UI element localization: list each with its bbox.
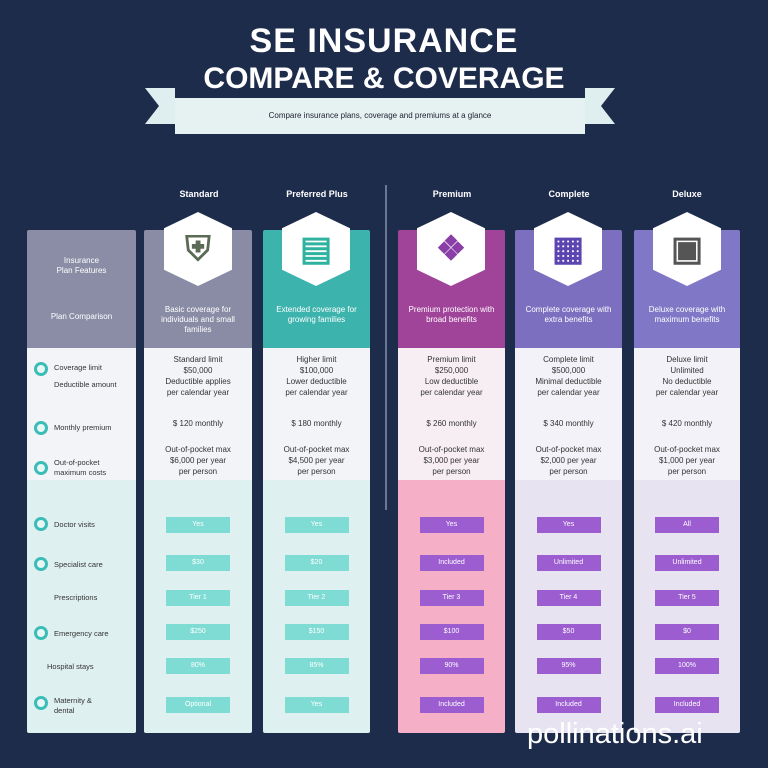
column 1: $50,000 <box>184 366 212 375</box>
column 5: per calendar year <box>656 388 718 397</box>
column 5: Deluxe limit <box>666 355 708 364</box>
column 2: Out-of-pocket max <box>284 445 349 454</box>
column 5 <box>634 230 740 733</box>
subtitle: Compare insurance plans, coverage and premiums at a glance <box>269 111 491 120</box>
panel: labels column: Hospital stays <box>47 662 94 671</box>
column 2: per person <box>297 467 336 476</box>
column 5: Out-of-pocket max <box>654 445 720 454</box>
column 4: per person <box>549 467 588 476</box>
column 3: per calendar year <box>420 388 483 397</box>
column 5: Unlimited <box>672 559 702 566</box>
icon: chart: ▦ <box>552 230 584 268</box>
icon: shield <box>164 212 232 286</box>
column 3: Included <box>438 559 465 566</box>
column 3: $250,000 <box>435 366 468 375</box>
column 5: $0 <box>683 628 691 635</box>
column 1: per calendar year <box>167 388 229 397</box>
column 2: per calendar year <box>285 388 348 397</box>
column 5: per person <box>668 467 706 476</box>
column 1: Optional <box>185 701 211 708</box>
panel: labels column: Emergency care <box>54 629 109 638</box>
column captions <box>179 189 702 199</box>
column 2: $4,500 per year <box>288 456 345 465</box>
panel: labels column: Specialist care <box>54 560 103 569</box>
column 1: $6,000 per year <box>170 456 226 465</box>
column captions: Standard <box>179 189 218 199</box>
column 3: Tier 3 <box>443 594 460 601</box>
panel: labels column: Plan Features <box>57 266 106 275</box>
icon: document <box>282 212 350 286</box>
column 1: $30 <box>192 559 204 566</box>
icon: document: ▤ <box>300 230 332 268</box>
column 2: 85% <box>309 662 324 669</box>
ribbon banner <box>145 88 615 134</box>
column 3: Yes <box>446 521 457 528</box>
column 5: Deluxe coverage with maximum benefits <box>649 305 725 324</box>
divider <box>385 185 387 510</box>
icon: briefcase: ▣ <box>671 230 703 268</box>
column 4: $2,000 per year <box>540 456 597 465</box>
panel: labels column: maximum costs <box>54 468 106 477</box>
column 5: $ 420 monthly <box>662 419 712 428</box>
icons <box>164 212 721 286</box>
column 1 <box>144 230 252 733</box>
column 2: Higher limit <box>296 355 336 364</box>
column 4: 95% <box>561 662 576 669</box>
column 5: No deductible <box>663 377 711 386</box>
column 3: $ 260 monthly <box>426 419 477 428</box>
column 4: Minimal deductible <box>535 377 602 386</box>
column 5: Unlimited <box>670 366 704 375</box>
panel: labels column: Out-of-pocket <box>54 458 99 467</box>
column 1: Yes <box>192 521 204 528</box>
panel: labels column: Coverage limit <box>54 363 102 372</box>
column 1: Basic coverage for individuals and small families <box>161 305 235 334</box>
column 2: $ 180 monthly <box>291 419 342 428</box>
column captions: Complete <box>548 189 590 199</box>
column 2: Tier 2 <box>308 594 325 601</box>
column 1: $ 120 monthly <box>173 419 223 428</box>
column 2: $20 <box>311 559 322 566</box>
panel: labels column <box>27 230 136 733</box>
title: SE INSURANCE <box>250 22 518 60</box>
column 4: $ 340 monthly <box>543 419 594 428</box>
column 2: $100,000 <box>300 366 333 375</box>
column 3: 90% <box>444 662 458 669</box>
column 4: Yes <box>563 521 574 528</box>
column 1: per person <box>179 467 217 476</box>
column captions: Premium <box>433 189 471 199</box>
column 3: per person <box>432 467 471 476</box>
column 3: $3,000 per year <box>423 456 480 465</box>
column 1: Tier 1 <box>189 594 207 601</box>
panel: labels column: Insurance <box>64 256 99 265</box>
column 5: $1,000 per year <box>659 456 715 465</box>
column 4: Included <box>555 701 582 708</box>
column 4 <box>515 230 622 733</box>
column 2: $150 <box>309 628 324 635</box>
panel: labels column: Prescriptions <box>54 593 97 602</box>
column 1: $250 <box>190 628 206 635</box>
panel: labels column: Monthly premium <box>54 423 112 432</box>
column 3: $100 <box>444 628 459 635</box>
column 2: Yes <box>311 701 322 708</box>
column 4: Complete limit <box>543 355 594 364</box>
column 3: Premium protection with broad benefits <box>409 305 494 324</box>
column 3: Included <box>438 701 465 708</box>
column 2: Yes <box>311 521 322 528</box>
panel: labels column: Maternity & <box>54 696 92 705</box>
column 1: 80% <box>191 662 205 669</box>
column captions: Preferred Plus <box>286 189 348 199</box>
icon: briefcase <box>653 212 721 286</box>
panel: labels column: Plan Comparison <box>51 312 112 321</box>
column 3: Low deductible <box>425 377 478 386</box>
icon: shield: ⛨ <box>185 230 211 268</box>
column 4: per calendar year <box>537 388 600 397</box>
title line 2: COMPARE & COVERAGE <box>203 62 565 95</box>
column 4: $500,000 <box>552 366 585 375</box>
column 5: Tier 5 <box>678 594 696 601</box>
panel: labels column: Deductible amount <box>54 380 117 389</box>
column 4: $50 <box>563 628 574 635</box>
column 5: Included <box>674 701 700 708</box>
panel: labels column: dental <box>54 706 74 715</box>
column 3 <box>398 230 505 733</box>
column 5: All <box>683 521 691 528</box>
column 2: Lower deductible <box>286 377 347 386</box>
column captions: Deluxe <box>672 189 702 199</box>
icon: family: ❖ <box>436 230 466 268</box>
panel: labels column: Doctor visits <box>54 520 95 529</box>
column 1: Standard limit <box>174 355 222 364</box>
column 4: Complete coverage with extra benefits <box>526 305 611 324</box>
column 3: Out-of-pocket max <box>419 445 484 454</box>
watermark: pollinations.ai <box>527 718 703 750</box>
column 1: Deductible applies <box>165 377 231 386</box>
column 4: Out-of-pocket max <box>536 445 601 454</box>
column 5: 100% <box>678 662 696 669</box>
icon: chart <box>534 212 602 286</box>
column 2 <box>263 230 370 733</box>
column 4: Tier 4 <box>560 594 577 601</box>
column 4: Unlimited <box>554 559 583 566</box>
column 1: Out-of-pocket max <box>165 445 231 454</box>
column 3: Premium limit <box>427 355 476 364</box>
column 2: Extended coverage for growing families <box>276 305 357 324</box>
icon: family <box>417 212 485 286</box>
